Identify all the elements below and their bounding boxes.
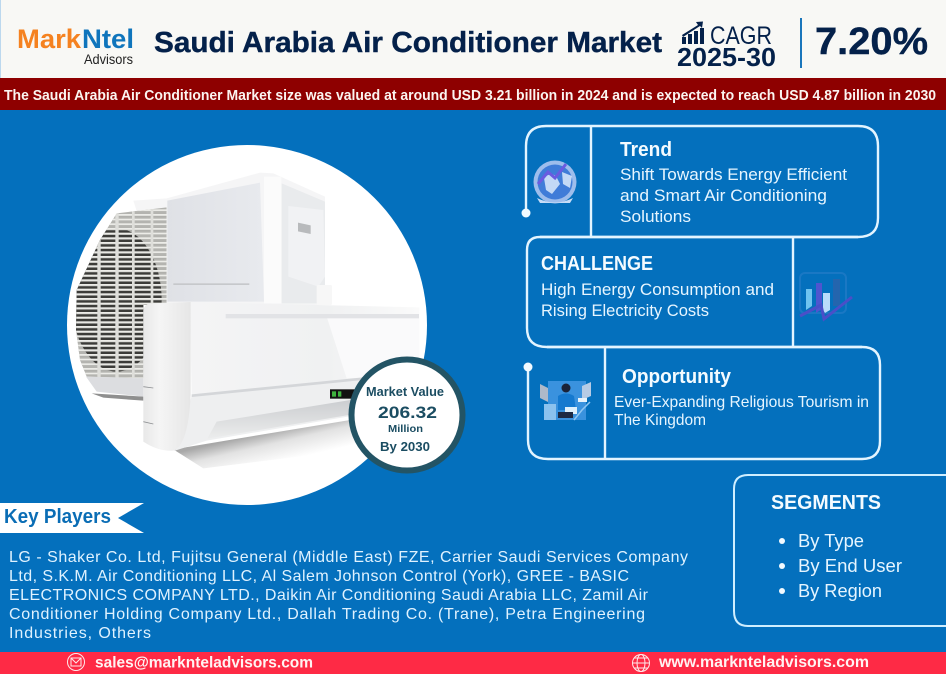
- market value badge: By 2030: [380, 440, 430, 454]
- key players ribbon: Key Players: [4, 506, 111, 528]
- panel: opportunity: [524, 347, 880, 459]
- CAGR label: 2025-30: [677, 42, 776, 72]
- panel: segments: SEGMENTS: [771, 492, 881, 514]
- panel: trend: Shift Towards Energy Efficient: [620, 165, 847, 184]
- logo: MarkNtel Advisors: Advisors: [84, 51, 133, 67]
- panel: opportunity: Ever-Expanding Religious Tourism in: [614, 394, 869, 411]
- title: Saudi Arabia Air Conditioner Market: [154, 27, 662, 59]
- panel: trend: Solutions: [620, 207, 691, 226]
- panel: challenge: [527, 237, 862, 347]
- key players list: Industries, Others: [9, 625, 151, 642]
- panel: trend: [522, 126, 878, 237]
- CAGR value: 7.20%: [815, 21, 928, 63]
- icon: person with data screens: [540, 381, 591, 420]
- CAGR label: CAGR: [710, 22, 772, 50]
- panel: challenge: CHALLENGE: [541, 253, 653, 275]
- panel: segments: By Region: [798, 581, 882, 601]
- icon: globe: [632, 654, 650, 672]
- panel: opportunity: The Kingdom: [614, 412, 706, 429]
- panel: segments: By Type: [798, 531, 864, 551]
- footer band: sales@marknteladvisors.com: [95, 654, 313, 672]
- key players list: Ltd, S.K.M. Air Conditioning LLC, Al Salem Johnson Control (York), GREE - BASIC: [9, 568, 629, 585]
- panel: segments: By End User: [798, 556, 902, 576]
- header band: [0, 0, 946, 78]
- market value badge: Million: [388, 423, 423, 435]
- key players list: LG - Shaker Co. Ltd, Fujitsu General (Middle East) FZE, Carrier Saudi Services Company: [9, 549, 688, 566]
- key players list: [9, 549, 688, 642]
- outdoor unit: [72, 173, 332, 401]
- summary banner: The Saudi Arabia Air Conditioner Market size was valued at around USD 3.21 billion in 2024 and is expected to reach USD 4.87 billion in 2030: [4, 88, 936, 104]
- panel: opportunity: Opportunity: [622, 366, 732, 388]
- footer band: www.marknteladvisors.com: [658, 654, 869, 671]
- icon: CAGR growth bars: [682, 22, 704, 44]
- market value badge: Market Value: [366, 385, 444, 399]
- icon: falling bars chart: [800, 273, 852, 319]
- icon: email: [68, 654, 84, 670]
- panel: trend: and Smart Air Conditioning: [620, 186, 827, 205]
- logo: MarkNtel Advisors: Ntel: [82, 24, 134, 54]
- panel: challenge: High Energy Consumption and: [541, 280, 774, 299]
- footer band: [0, 652, 946, 674]
- panel: challenge: Rising Electricity Costs: [541, 301, 709, 320]
- market value badge: 206.32: [378, 403, 437, 422]
- indoor unit: [143, 302, 419, 468]
- logo: MarkNtel Advisors: Mark: [17, 24, 82, 54]
- product photo circle: air conditioner: [67, 145, 427, 505]
- key players list: Conditioner Holding Company Ltd., Dallah Trading Co. (Trane), Petra Engineering: [9, 606, 645, 623]
- key players ribbon: [0, 503, 144, 533]
- panel: segments: [734, 475, 946, 626]
- key players list: ELECTRONICS COMPANY LTD., Daikin Air Conditioning Saudi Arabia LLC, Zamil Air: [9, 587, 649, 604]
- panel: trend: Trend: [620, 139, 672, 161]
- CAGR label: [677, 22, 776, 72]
- icon: globe with growth arrow: [534, 160, 576, 204]
- summary banner: [0, 78, 946, 110]
- logo: MarkNtel Advisors: [17, 24, 134, 67]
- market value badge: [352, 360, 462, 470]
